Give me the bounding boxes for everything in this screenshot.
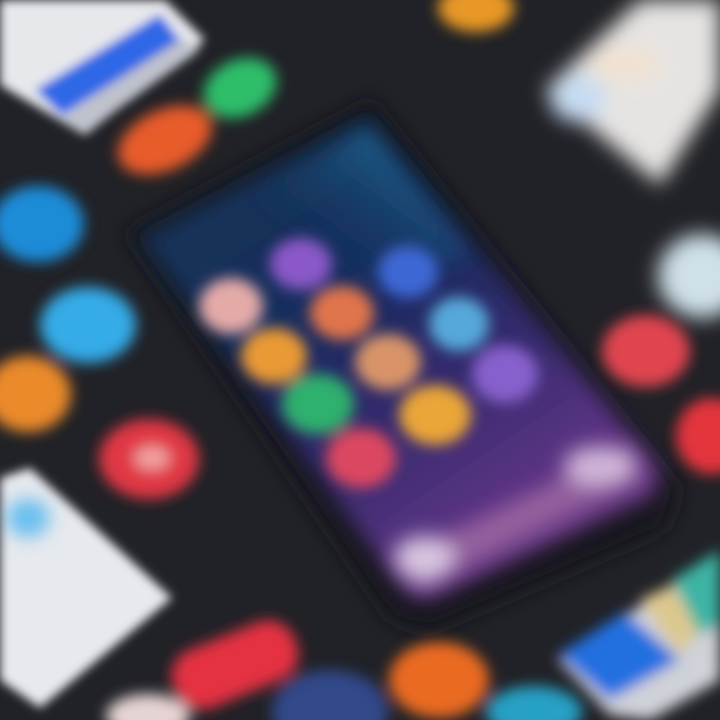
icon: amber app xyxy=(241,328,307,384)
icon: bottom cyan xyxy=(486,686,582,720)
icon: yellow app xyxy=(399,385,471,445)
icon: orange-red app xyxy=(310,286,374,340)
icon: green app xyxy=(282,374,354,434)
icon: right red circle xyxy=(602,315,690,387)
panel: bottom-right colourful card xyxy=(558,550,720,720)
icon: purple app xyxy=(270,238,332,290)
phone screen xyxy=(140,118,660,600)
screen top glow xyxy=(185,128,470,330)
icon: violet app xyxy=(472,345,538,403)
phone screen bottom bar xyxy=(394,445,640,590)
icon: red app xyxy=(326,428,396,488)
icon: bottom navy xyxy=(272,670,388,720)
icon: orange circle xyxy=(0,356,71,432)
icon: blue app xyxy=(378,246,438,298)
phone body xyxy=(125,100,680,632)
panel: top-left white card xyxy=(0,0,205,135)
icon: far right red xyxy=(676,398,720,474)
icon: peach app xyxy=(355,334,421,390)
icon: red circle xyxy=(99,419,199,499)
icon: light blue app xyxy=(429,297,489,351)
icon: bottom red pill xyxy=(163,612,307,718)
icon: cyan circle xyxy=(40,287,136,363)
icon: blue circle xyxy=(0,186,84,262)
icon: top orange xyxy=(438,0,514,32)
panel: top-right white card xyxy=(545,0,720,185)
screen icons xyxy=(199,238,538,488)
icon: bottom orange circle xyxy=(389,642,489,718)
icon: pink app xyxy=(199,278,263,334)
icon: green pill xyxy=(194,47,286,129)
icon: orange pill xyxy=(107,92,223,188)
panel: bottom-left white card xyxy=(0,468,172,708)
panel: right edge pale icon xyxy=(658,234,720,318)
icon: bottom pale xyxy=(106,694,190,720)
